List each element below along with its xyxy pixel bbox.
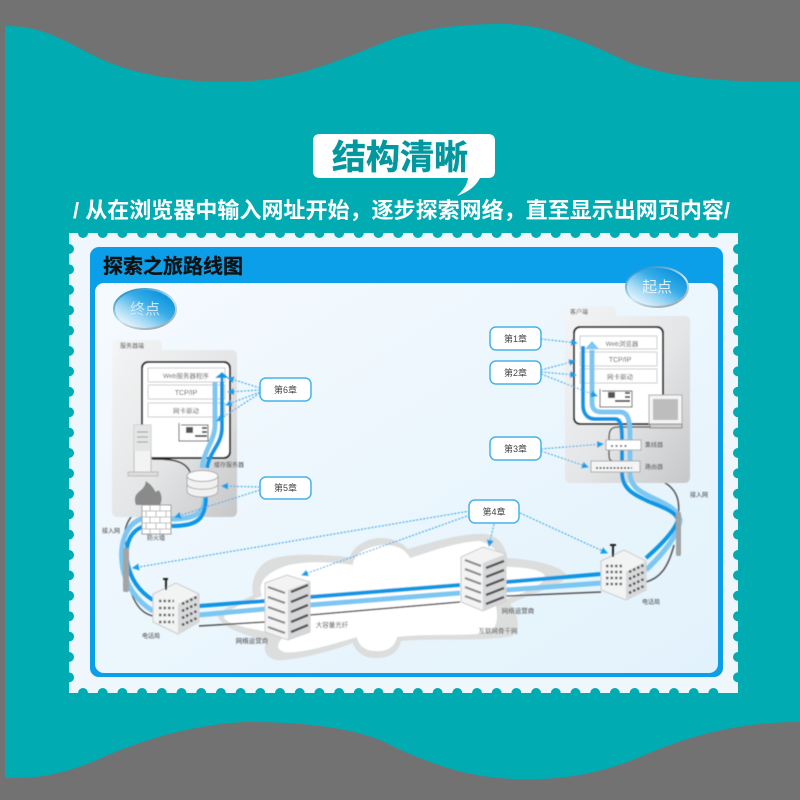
panel: client folder: 客户端 bbox=[570, 308, 588, 316]
icon: telephone office left bbox=[153, 579, 199, 634]
client software window: Web浏览器 bbox=[606, 339, 639, 348]
label: internet backbone: 互联网骨干网 bbox=[478, 626, 518, 635]
icon: firewall bbox=[142, 505, 171, 534]
label: telephone office left: 电话局 bbox=[142, 632, 160, 640]
chapter 4 box: 第4章 bbox=[482, 506, 506, 517]
chapter 5 box bbox=[260, 477, 311, 499]
label: access network left: 接入网 bbox=[102, 527, 120, 535]
chapter 1 box bbox=[490, 327, 541, 350]
start point badge: 起点 bbox=[642, 279, 672, 296]
chapter 4 box bbox=[469, 500, 519, 523]
backbone route lines bbox=[199, 574, 601, 615]
client internal cable bbox=[609, 427, 650, 461]
icon: client network card bbox=[600, 389, 632, 407]
end point badge bbox=[114, 289, 176, 329]
server internal cable bbox=[152, 459, 190, 472]
server software window bbox=[142, 362, 230, 458]
label: carrier left: 网络运营商 bbox=[236, 636, 269, 645]
label: router: 路由器 bbox=[645, 463, 663, 471]
chapter 5 box: 第5章 bbox=[274, 482, 297, 493]
panel: server folder: 服务器端 bbox=[120, 342, 144, 350]
speech bubble heading: 结构清晰 bbox=[332, 139, 468, 177]
icon: carrier building right bbox=[461, 547, 506, 611]
route lines: client side bbox=[583, 341, 680, 570]
route lines: server side bbox=[122, 372, 229, 611]
chapter 1 box: 第1章 bbox=[504, 333, 527, 344]
client software window: TCP/IP bbox=[609, 357, 632, 364]
icon: telephone office right bbox=[601, 545, 646, 600]
subtitle: / 从在浏览器中输入网址开始，逐步探索网络，直至显示出网页内容/ bbox=[73, 198, 730, 223]
icon: cache server bbox=[187, 470, 218, 497]
label: firewall: 防火墙 bbox=[147, 534, 165, 542]
icon: pole right bbox=[676, 512, 681, 556]
label: cache server: 缓存服务器 bbox=[214, 461, 244, 469]
client software window: 网卡驱动 bbox=[607, 372, 634, 381]
panel: route map bbox=[90, 247, 723, 677]
icon: router bbox=[591, 461, 640, 472]
label: hub: 集线器 bbox=[645, 441, 663, 449]
icon: pole left bbox=[123, 548, 129, 592]
stamp frame bbox=[69, 233, 738, 693]
chapter 3 box: 第3章 bbox=[504, 443, 527, 454]
diagram bbox=[102, 306, 708, 660]
gray cable backbone bbox=[125, 472, 679, 626]
icon: server tower bbox=[128, 425, 158, 476]
label: carrier right: 网络运营商 bbox=[502, 606, 535, 615]
chapter 3 box bbox=[490, 437, 541, 460]
panel: server folder bbox=[112, 340, 237, 517]
label: high capacity fibre: 大容量光纤 bbox=[316, 620, 349, 629]
chapter 2 box bbox=[490, 361, 541, 384]
server software window: TCP/IP bbox=[175, 390, 198, 397]
end point badge: 终点 bbox=[130, 301, 160, 318]
label: access network right: 接入网 bbox=[690, 491, 708, 499]
chapter 2 box: 第2章 bbox=[504, 367, 527, 378]
icon: monitor bbox=[649, 395, 682, 428]
server software window: 网卡驱动 bbox=[173, 406, 200, 415]
panel: client folder bbox=[565, 306, 690, 483]
panel title: 探索之旅路线图 bbox=[103, 254, 243, 278]
chapter 6 box: 第6章 bbox=[274, 384, 297, 395]
client software window bbox=[574, 327, 663, 424]
label: telephone office right: 电话局 bbox=[642, 598, 660, 606]
network cloud bbox=[218, 534, 567, 660]
chapter arrows bbox=[133, 339, 607, 575]
speech bubble heading bbox=[313, 134, 495, 196]
icon: server network card bbox=[179, 423, 208, 441]
icon: firewall flame bbox=[135, 481, 162, 505]
icon: hub bbox=[606, 440, 641, 450]
chapter 6 box bbox=[260, 378, 311, 401]
icon: carrier building left bbox=[265, 575, 310, 640]
start point badge bbox=[626, 267, 688, 307]
server software window: Web服务器程序 bbox=[163, 371, 209, 380]
